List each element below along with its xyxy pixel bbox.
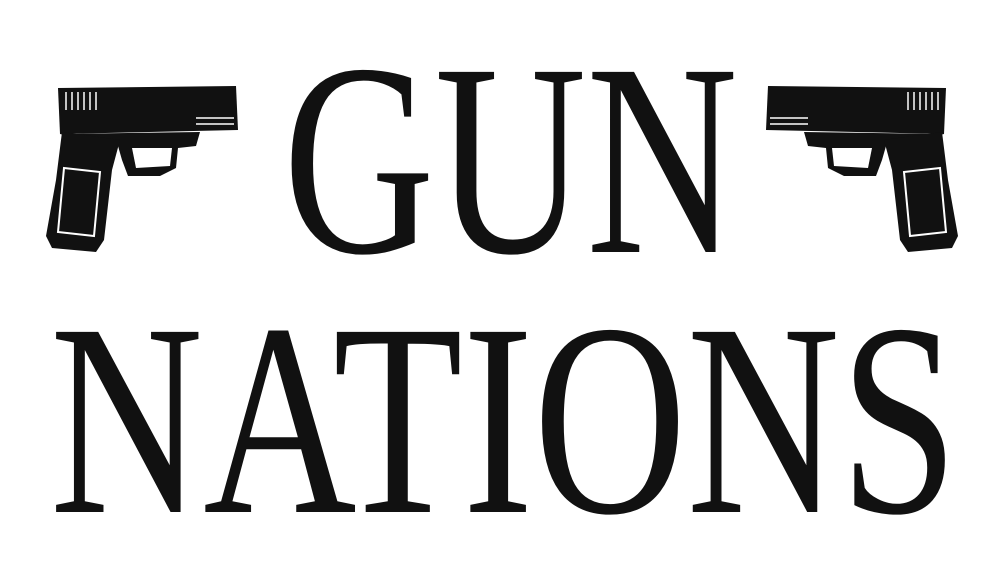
icon: left pistol <box>46 86 238 252</box>
title: GUN: GUN <box>283 8 738 312</box>
icon: right pistol <box>766 86 958 252</box>
